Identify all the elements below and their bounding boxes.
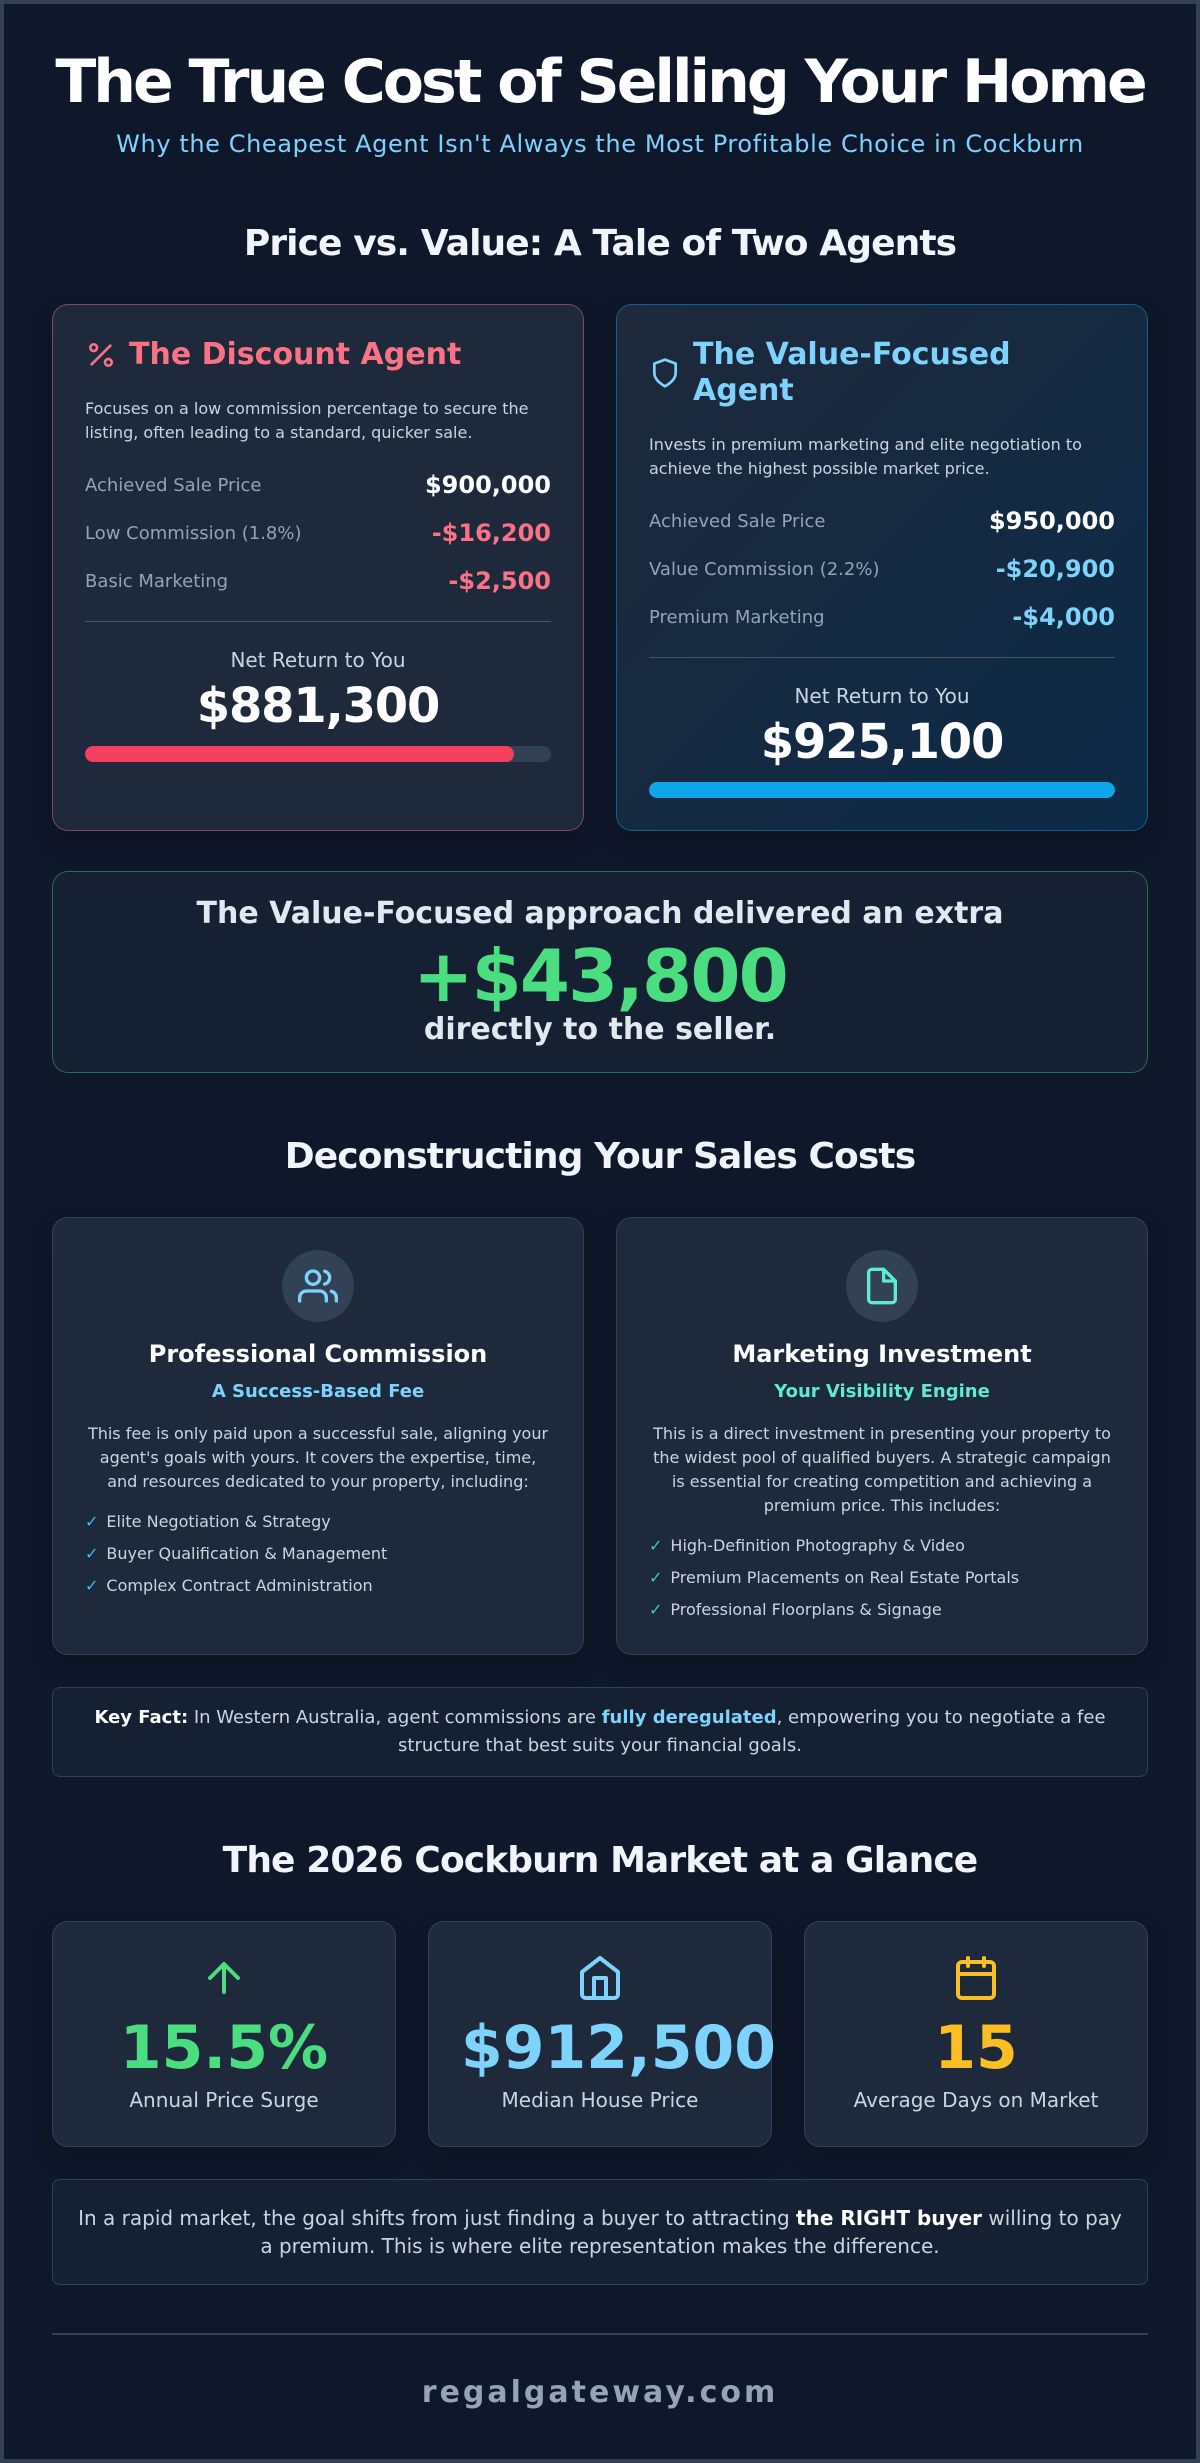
- label: Average Days on Market: [854, 2088, 1098, 2112]
- icon: house: [580, 1956, 620, 2000]
- stat: price surge: [52, 1921, 396, 2147]
- commission checklist: [85, 1512, 387, 1595]
- row: sale price: Achieved Sale Price: [85, 474, 261, 496]
- row: marketing: [85, 567, 551, 595]
- net return: Net Return to You: [794, 684, 970, 708]
- net return: $881,300: [197, 678, 439, 734]
- icon: calendar: [956, 1956, 996, 2000]
- callout: extra to seller: The Value-Focused approach delivered an extra: [197, 896, 1003, 931]
- row: marketing: [649, 603, 1115, 631]
- panel: discount agent: [52, 304, 584, 831]
- row: sale price: [649, 507, 1115, 535]
- net return: [85, 621, 551, 762]
- commission heading: Professional Commission: [149, 1340, 487, 1368]
- row: commission: -$20,900: [996, 555, 1115, 583]
- marketing checklist: ✓ Premium Placements on Real Estate Portals: [649, 1568, 1019, 1587]
- label: Median House Price: [502, 2088, 698, 2112]
- row: sale price: $950,000: [989, 507, 1115, 535]
- row: marketing: -$4,000: [1012, 603, 1115, 631]
- commission checklist: ✓ Elite Negotiation & Strategy: [85, 1512, 331, 1531]
- row: sale price: Achieved Sale Price: [649, 510, 825, 532]
- title: The True Cost of Selling Your Home: [55, 47, 1145, 117]
- comparison panels: [52, 304, 1148, 831]
- progress bar: 100%: [649, 782, 1115, 798]
- marketing text: This is a direct investment in presenting your property to the widest pool of qualified buyers. A strategic campaign is essential for creating competition and achieving a premium price. This includes:: [653, 1424, 1111, 1515]
- commission text: This fee is only paid upon a successful sale, aligning your agent's goals with yours. It covers the expertise, time, and resources dedicated to your property, including:: [88, 1424, 548, 1491]
- icon: arrow up: [208, 1962, 240, 1994]
- net return: [649, 657, 1115, 798]
- panel: marketing investment: [616, 1217, 1148, 1655]
- marketing checklist: ✓ High-Definition Photography & Video: [649, 1536, 965, 1555]
- panel: professional commission: [52, 1217, 584, 1655]
- market stats: [52, 1921, 1148, 2147]
- cost panels: [52, 1217, 1148, 1655]
- value agent heading with shield icon: The Value-Focused Agent: [693, 337, 1011, 408]
- row: commission: Value Commission (2.2%): [649, 558, 879, 580]
- subtitle: Why the Cheapest Agent Isn't Always the Most Profitable Choice in Cockburn: [116, 130, 1084, 158]
- heading: market: The 2026 Cockburn Market at a Glance: [223, 1840, 977, 1881]
- key fact note: Key Fact: In Western Australia, agent commissions are fully deregulated, empowering you to negotiate a fee structure that best suits your financial goals.: [94, 1707, 1106, 1756]
- stat: days on market: [804, 1921, 1148, 2147]
- value: 15: [934, 2013, 1018, 2083]
- value agent description: Invests in premium marketing and elite negotiation to achieve the highest possible market price.: [649, 435, 1082, 478]
- row: commission: [85, 519, 551, 547]
- row: marketing: Premium Marketing: [649, 606, 825, 628]
- callout closing line: directly to the seller.: [424, 1012, 776, 1047]
- marketing checklist: ✓ Professional Floorplans & Signage: [649, 1600, 942, 1619]
- row: marketing: -$2,500: [448, 567, 551, 595]
- closing note: In a rapid market, the goal shifts from just finding a buyer to attracting the RIGHT buyer willing to pay a premium. This is where elite representation makes the difference.: [78, 2206, 1122, 2258]
- icon: document: [846, 1250, 918, 1322]
- key fact note: [52, 1687, 1148, 1777]
- discount agent description: Focuses on a low commission percentage to secure the listing, often leading to a standard, quicker sale.: [85, 399, 528, 442]
- commission subheading: A Success-Based Fee: [212, 1381, 424, 1402]
- row: marketing: Basic Marketing: [85, 570, 228, 592]
- marketing heading: Marketing Investment: [732, 1340, 1032, 1368]
- footer: [52, 2333, 1148, 2411]
- marketing checklist: [649, 1536, 1019, 1619]
- progress bar: 92%: [85, 746, 551, 762]
- callout: extra to seller: [52, 871, 1148, 1073]
- label: Annual Price Surge: [129, 2088, 319, 2112]
- commission checklist: ✓ Buyer Qualification & Management: [85, 1544, 387, 1563]
- discount agent heading with percent icon: The Discount Agent: [129, 337, 461, 372]
- heading: price vs value: Price vs. Value: A Tale of Two Agents: [244, 223, 956, 264]
- closing note: [52, 2179, 1148, 2285]
- big number: +$43,800: [413, 934, 787, 1018]
- row: commission: [649, 555, 1115, 583]
- commission checklist: ✓ Complex Contract Administration: [85, 1576, 373, 1595]
- footer: regalgateway.com: [422, 2375, 778, 2410]
- value: $912,500: [461, 2013, 776, 2083]
- net return: Net Return to You: [230, 648, 406, 672]
- panel: value-focused agent: [616, 304, 1148, 831]
- marketing subheading: Your Visibility Engine: [774, 1381, 990, 1402]
- row: commission: -$16,200: [432, 519, 551, 547]
- net return: $925,100: [761, 714, 1003, 770]
- stat: median price: [428, 1921, 772, 2147]
- row: sale price: $900,000: [425, 471, 551, 499]
- value: 15.5%: [120, 2013, 328, 2083]
- row: commission: Low Commission (1.8%): [85, 522, 302, 544]
- heading: sales costs: Deconstructing Your Sales Costs: [285, 1136, 915, 1177]
- row: sale price: [85, 471, 551, 499]
- icon: users: [282, 1250, 354, 1322]
